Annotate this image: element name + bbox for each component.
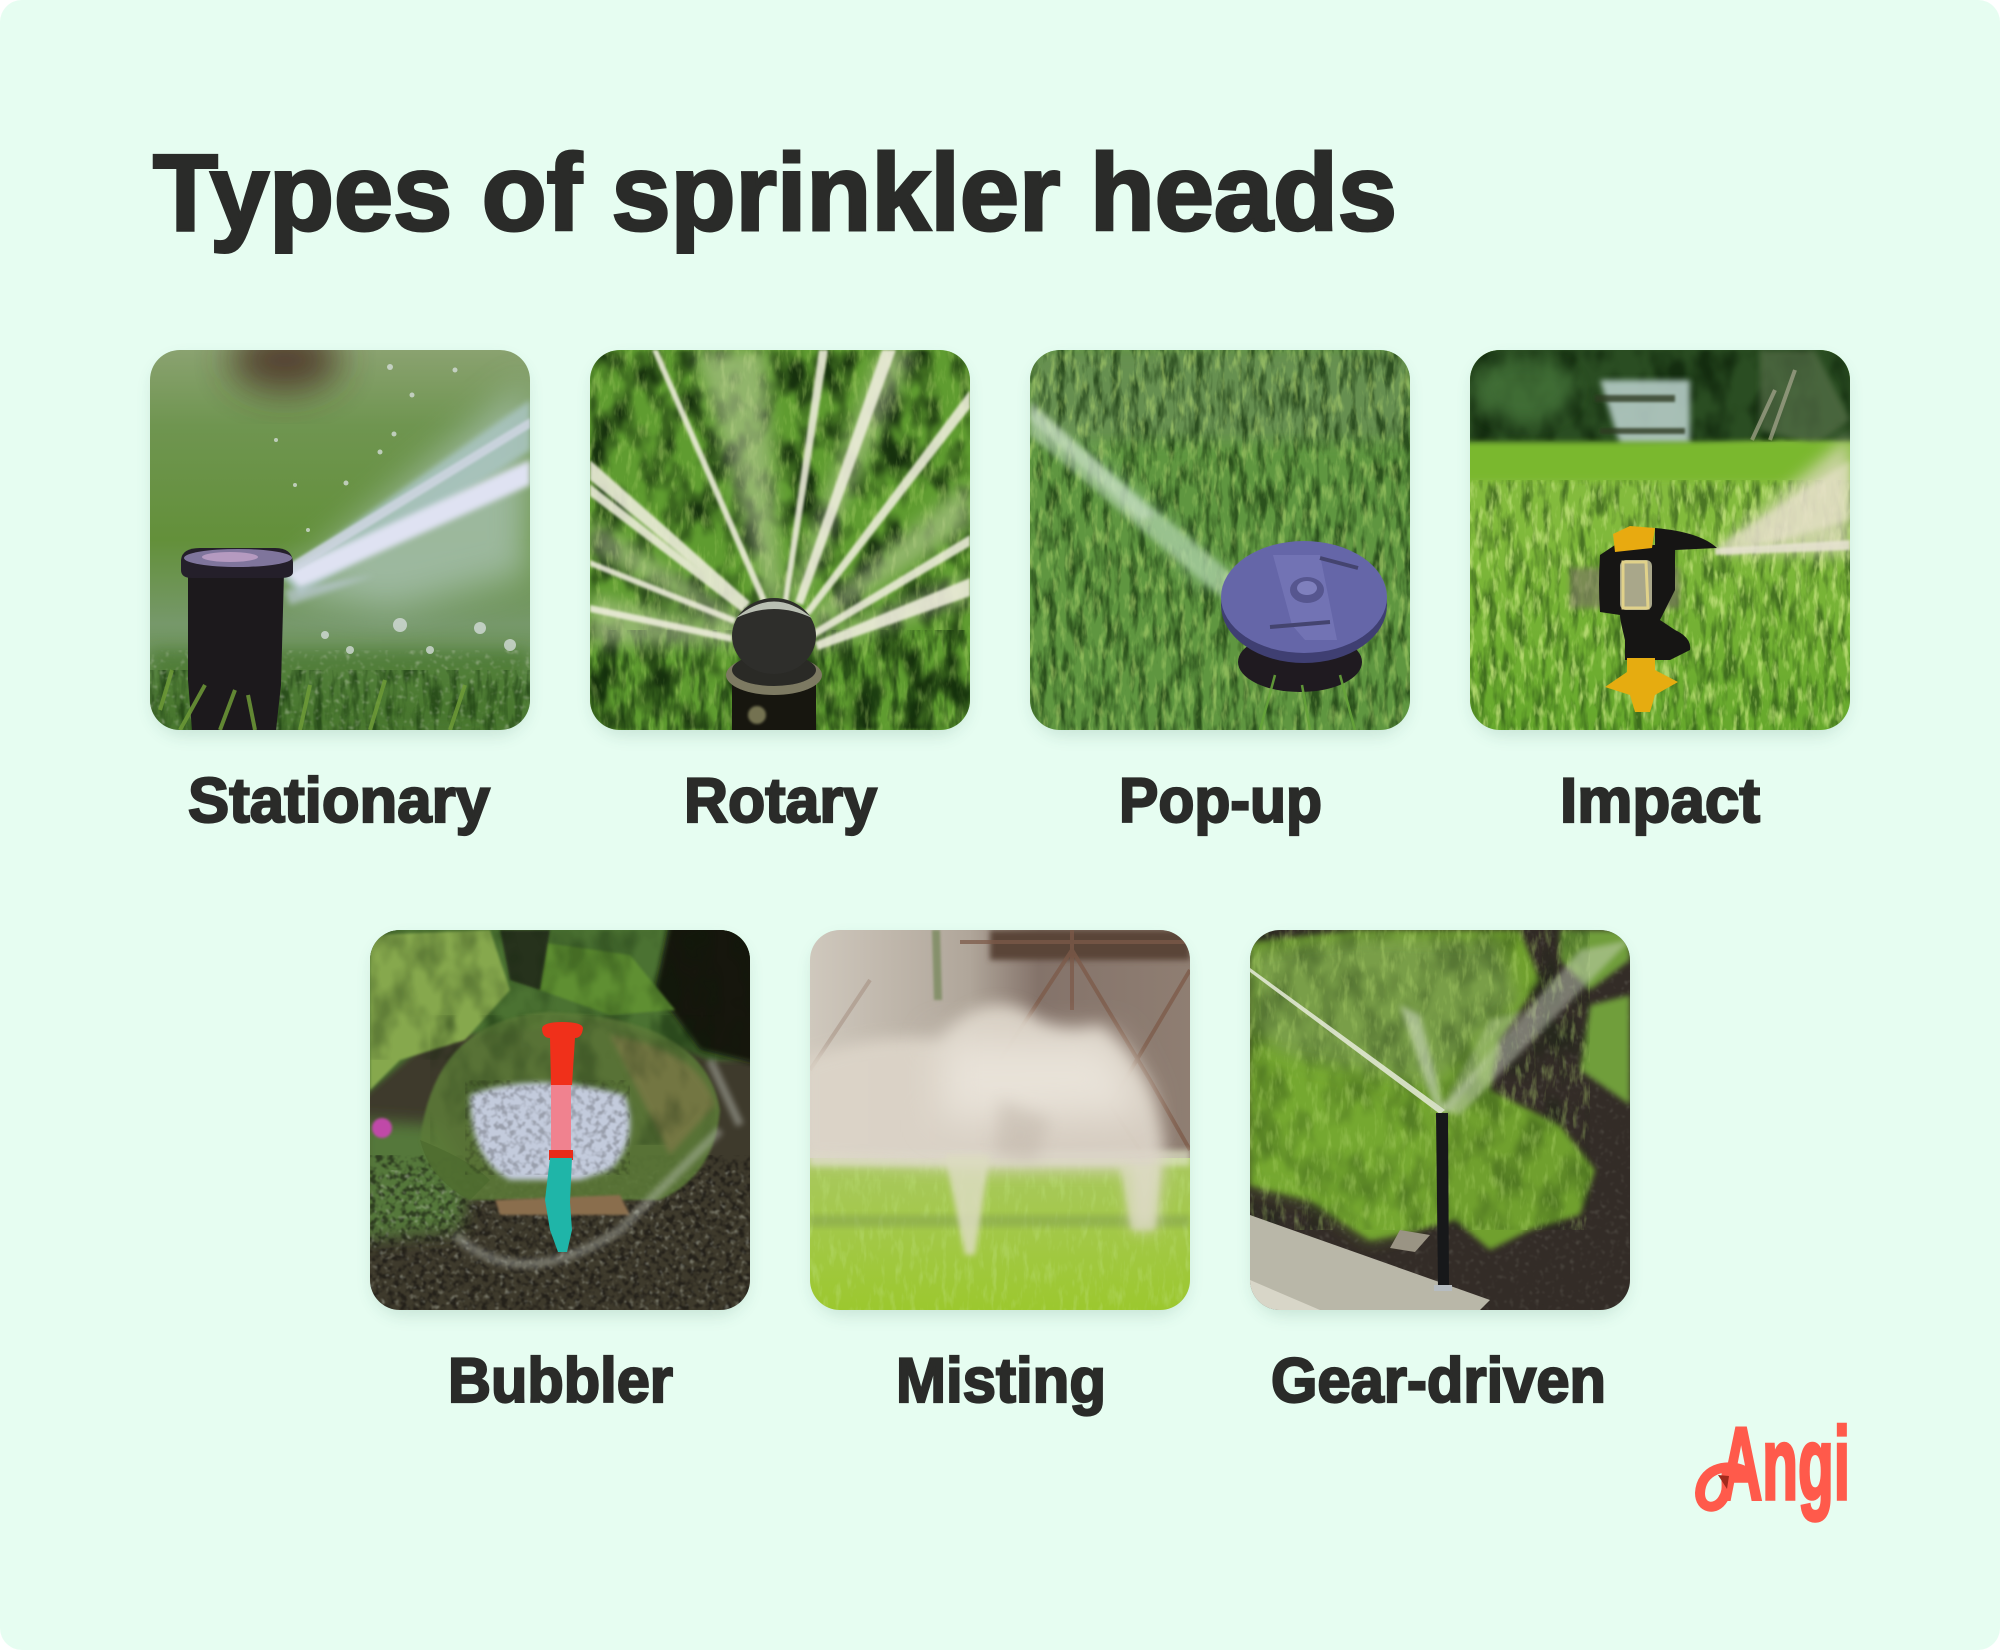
photo: bubbler sprinkler <box>360 920 760 1314</box>
photo: stationary sprinkler <box>150 328 530 734</box>
label: rotary: Rotary <box>684 766 877 836</box>
panel: gear-driven <box>1250 930 1630 1416</box>
label: impact: Impact <box>1560 766 1760 836</box>
photo: rotary sprinkler <box>590 350 970 734</box>
photo: pop-up sprinkler <box>1030 350 1410 734</box>
title: Types of sprinkler heads <box>153 132 1397 254</box>
label: bubbler: Bubbler <box>448 1346 673 1416</box>
panel: rotary <box>590 350 970 836</box>
label: misting: Misting <box>896 1346 1106 1416</box>
panel: stationary <box>150 328 530 836</box>
panel: impact <box>1468 350 1852 836</box>
photo: gear-driven sprinkler <box>1250 930 1630 1314</box>
label: gear-driven: Gear-driven <box>1271 1346 1606 1416</box>
label: pop-up: Pop-up <box>1119 766 1322 836</box>
panel: pop-up <box>1030 350 1410 836</box>
panel: misting <box>800 930 1190 1416</box>
label: stationary: Stationary <box>188 766 490 836</box>
photo: misting sprinkler <box>800 930 1190 1314</box>
panel: bubbler <box>360 920 760 1416</box>
logo: Angi <box>1700 1406 1850 1521</box>
logo: Angi: Angi <box>1720 1406 1850 1521</box>
photo: impact sprinkler <box>1468 350 1852 740</box>
